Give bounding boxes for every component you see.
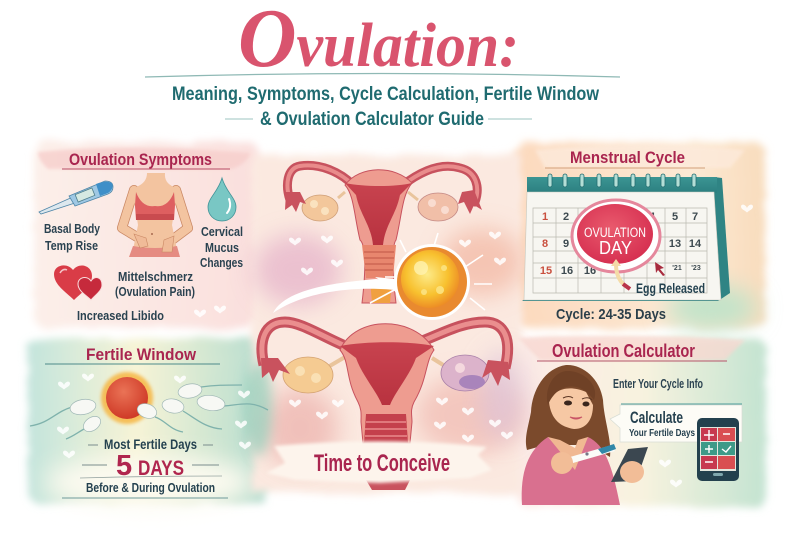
text: mittelschmerz: (Ovulation Pain)	[115, 284, 195, 299]
banner: time to conceive: Time to Conceive	[314, 450, 450, 477]
text: cervical mucus changes: Cervical	[201, 224, 243, 239]
calendar grid	[533, 208, 707, 293]
title: & Ovulation Calculator Guide	[260, 109, 484, 130]
text: mittelschmerz: Mittelschmerz	[118, 269, 193, 284]
icon: egg with sperm	[30, 372, 268, 439]
text: mittelschmerz	[115, 269, 195, 299]
text: before and during ovulation: Before & During Ovulation	[86, 480, 215, 495]
central anatomy: lower uterus	[261, 322, 510, 490]
text: increased libido: Increased Libido	[77, 308, 164, 323]
text: basal body temp rise	[44, 221, 101, 253]
ovulation day bubble: OVULATION	[584, 225, 646, 240]
stat: 5 days: DAYS	[138, 457, 184, 480]
uterus body	[340, 324, 434, 443]
calendar numbers: '21	[672, 265, 682, 272]
ovaries	[302, 193, 458, 221]
text: cervical mucus changes: Mucus	[205, 240, 239, 255]
text: cervical mucus changes: Changes	[200, 255, 243, 270]
text: cycle days: Cycle: 24-35 Days	[556, 306, 666, 323]
icon: calculator phone	[697, 418, 739, 481]
handheld phone	[611, 447, 648, 482]
rays	[370, 233, 492, 310]
icon: water drop	[208, 178, 236, 221]
illustration: woman with test and phone	[522, 365, 648, 505]
panel: ovulation symptoms	[38, 148, 250, 323]
heading: menstrual cycle	[535, 145, 745, 168]
calendar numbers: 15	[540, 265, 552, 277]
icon: hearts	[54, 265, 102, 300]
stat: 5 days: 5	[116, 450, 132, 482]
text: egg released: Egg Released	[636, 280, 705, 296]
text: cervical mucus changes	[200, 224, 243, 270]
icon: torso	[122, 173, 188, 257]
text: enter your cycle info: Enter Your Cycle Info	[613, 377, 703, 391]
icon: cursor arrow	[655, 262, 665, 276]
ovulation day bubble: DAY	[599, 238, 632, 258]
calendar numbers: 14	[689, 238, 702, 250]
panel: ovulation calculator	[518, 336, 745, 505]
calendar numbers: 5	[672, 211, 678, 223]
heading: ovulation calculator	[518, 336, 745, 361]
text: basal body temp rise: Basal Body	[44, 221, 101, 236]
text: most fertile days: Most Fertile Days	[104, 436, 197, 452]
icon: thermometer	[39, 181, 113, 214]
title: Meaning, Symptoms, Cycle Calculation, Fertile Window	[172, 84, 599, 105]
calendar numbers: 16	[561, 265, 573, 277]
ovaries	[283, 355, 489, 393]
callout: calculate: Calculate	[630, 408, 683, 427]
banner: time to conceive	[266, 441, 492, 483]
calendar rings	[548, 174, 696, 187]
calendar numbers: 13	[669, 238, 681, 250]
callout: calculate	[610, 404, 742, 442]
background hearts	[57, 205, 753, 488]
callout: calculate: Your Fertile Days	[629, 427, 695, 439]
panel: menstrual cycle	[522, 145, 745, 323]
arrow: egg to bubble	[611, 259, 630, 289]
calendar numbers: '23	[691, 265, 701, 272]
swoosh	[273, 279, 398, 313]
calendar numbers: 8	[542, 238, 548, 250]
icon: calendar	[522, 174, 730, 301]
uterus body	[345, 170, 412, 303]
pregnancy test	[570, 444, 616, 463]
calendar numbers	[540, 211, 702, 277]
calendar numbers: 7	[692, 211, 698, 223]
calendar numbers: 1	[542, 211, 548, 223]
panel backgrounds	[28, 142, 766, 508]
calendar numbers: 4	[649, 211, 656, 223]
heading: fertile window: Fertile Window	[86, 345, 197, 364]
calendar numbers: 16	[584, 265, 596, 277]
egg cell with swoosh	[273, 233, 492, 320]
stat: 5 days	[82, 450, 219, 482]
panel: fertile window	[30, 345, 268, 498]
central anatomy: upper uterus	[285, 165, 482, 303]
text: basal body temp rise: Temp Rise	[45, 238, 98, 253]
ovulation day bubble	[572, 200, 660, 272]
calendar numbers: 9	[563, 238, 569, 250]
calendar numbers: 2	[563, 211, 569, 223]
heading: menstrual cycle: Menstrual Cycle	[570, 148, 685, 167]
heading: ovulation symptoms: Ovulation Symptoms	[69, 150, 212, 169]
heading: ovulation calculator: Ovulation Calculator	[552, 341, 695, 361]
title	[145, 0, 620, 130]
